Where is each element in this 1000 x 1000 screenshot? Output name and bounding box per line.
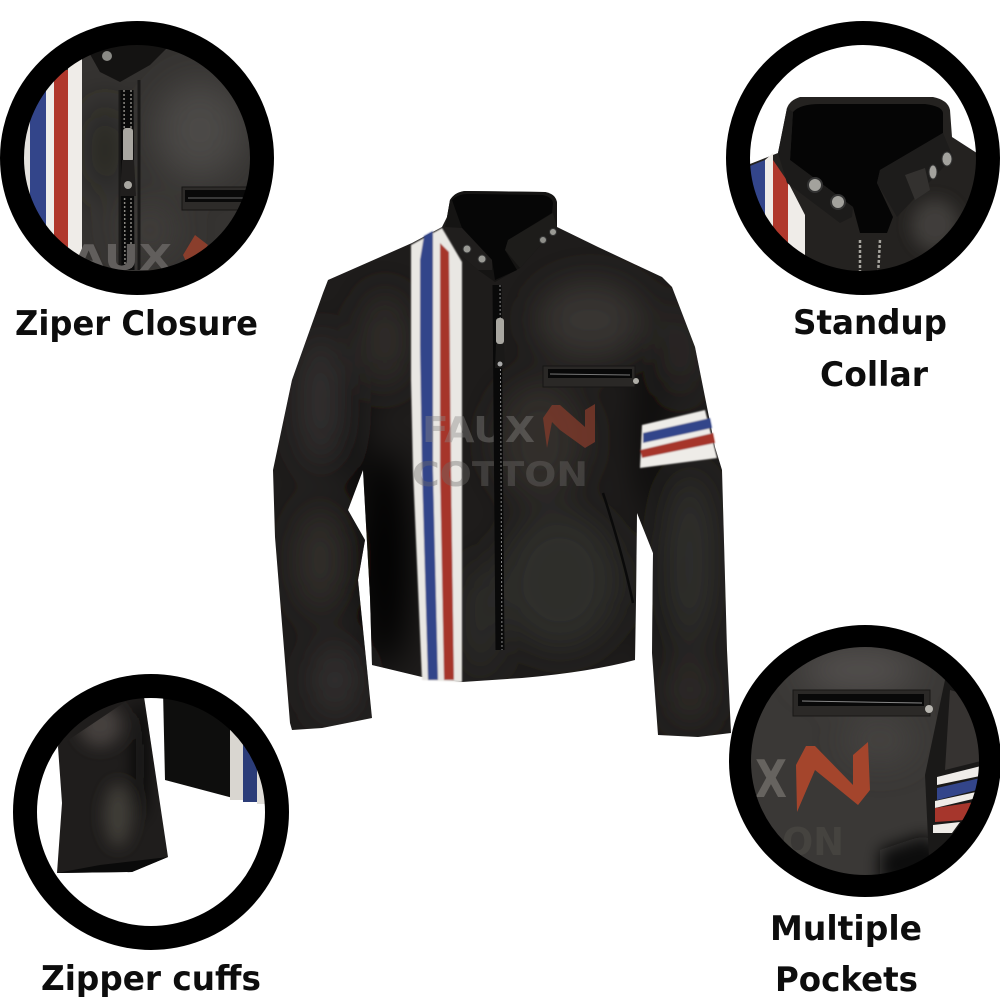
collar snaps	[463, 228, 556, 263]
jacket leather silhouette	[260, 180, 740, 750]
center zipper	[495, 285, 505, 650]
label: zipper cuffs: Zipper cuffs	[41, 959, 261, 999]
detail circle: standup collar	[738, 33, 988, 283]
detail circle: zipper cuffs	[25, 686, 277, 938]
chest stripes	[411, 228, 462, 682]
label: multiple pockets: Pockets	[775, 960, 918, 1000]
detail circle: multiple pockets: ON	[782, 820, 844, 864]
arm stripes	[640, 410, 717, 468]
watermark: COTTON	[412, 455, 588, 495]
detail circle: zipper closure	[12, 33, 262, 283]
chest pocket	[543, 366, 639, 387]
label: zipper closure: Ziper Closure	[15, 304, 258, 344]
watermark N	[543, 404, 595, 448]
detail circle: multiple pockets	[740, 636, 990, 886]
side pockets	[603, 493, 633, 603]
detail circle: zipper closure: AUX	[72, 238, 172, 279]
label: standup collar: Standup	[793, 303, 947, 343]
label: multiple pockets: Multiple	[770, 909, 922, 949]
watermark	[412, 410, 588, 495]
watermark: FAUX	[422, 410, 535, 451]
label: multiple pockets	[770, 909, 922, 1000]
collar	[443, 191, 557, 282]
detail circle: multiple pockets: X	[755, 750, 787, 810]
label: standup collar: Collar	[820, 355, 928, 395]
jacket illustration	[260, 180, 740, 750]
label: standup collar	[793, 303, 947, 395]
